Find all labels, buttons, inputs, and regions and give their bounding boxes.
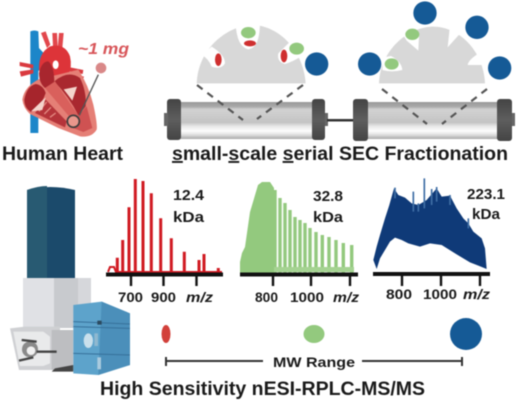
chart: 32.8 kDa spectrum: m/z [333,289,359,305]
ion source [22,341,38,357]
axis [240,272,358,276]
left ventricle [54,75,86,115]
chart: 223.1 kDa spectrum [373,178,505,302]
left atrium [39,61,54,88]
ticks [273,275,350,286]
column caps [353,99,368,141]
chart: 32.8 kDa spectrum [240,182,359,305]
sampling ring [67,115,79,127]
chart: 32.8 kDa spectrum: kDa [313,210,344,226]
ticks [131,275,196,286]
icon: mass spectrometer [10,186,130,375]
apex [73,106,92,132]
heading: High Sensitivity nESI-RPLC-MS/MS: High Sensitivity nESI-RPLC-MS/MS [100,379,425,400]
chart: 223.1 kDa spectrum: m/z [463,286,490,302]
chart: 12.4 kDa spectrum [106,179,223,305]
heart body [22,70,97,137]
column caps [167,99,181,140]
top tower [27,187,75,278]
range label: MW Range [273,354,355,370]
axis labels: 700 [118,289,143,305]
column body [178,102,316,139]
LC module [73,302,130,375]
blue dot [450,318,482,350]
aortic opening [53,60,59,69]
mass label: 32.8 [313,189,343,205]
mass label: 12.4 [173,188,204,204]
septum [45,81,78,121]
dashed zoom lines [197,85,303,120]
mass label: 223.1 [467,187,505,203]
heading: Human Heart: Human Heart [2,144,124,165]
green dot [304,325,324,343]
aorta arch [39,46,71,81]
ticks [402,275,480,286]
peak envelope [373,178,487,269]
chart: 32.8 kDa spectrum: 1000 [290,289,324,305]
dashed zoom lines [382,89,487,124]
chart: 12.4 kDa spectrum: m/z [186,289,213,305]
sampling line [79,75,98,115]
right ventricle muscle [35,100,67,127]
chart: 223.1 kDa spectrum: kDa [472,207,501,223]
right atrium [24,84,46,112]
legend: MW range [162,318,482,370]
axis labels: 800 [386,286,412,302]
blue protein [305,52,328,76]
chart: 12.4 kDa spectrum: kDa [173,210,205,226]
blue proteins [413,1,437,25]
valves [31,87,77,111]
chart: 223.1 kDa spectrum: 1000 [423,286,457,302]
peak envelope [240,182,274,273]
chart: 12.4 kDa spectrum: 900 [151,289,176,305]
peaks [108,179,222,273]
column body [365,102,500,139]
label: 1 mg: ~1 mg [78,41,129,58]
tissue sample [96,63,106,73]
source housing [10,327,60,370]
red proteins [244,40,256,46]
peaks [275,190,352,273]
icon: human heart [20,30,106,137]
pulmonary stubs [20,62,84,80]
porous bead [197,22,328,83]
heading: small-scale serial SEC Fractionation: small-scale serial SEC Fractionation [172,144,508,165]
panel: SEC column 2 [353,1,515,141]
vena cava [30,30,47,133]
axis [373,272,490,276]
panel: SEC column 1 [164,22,328,140]
green proteins [241,27,256,38]
connector tube [327,119,354,122]
middle housing [23,278,54,328]
green proteins [405,29,419,40]
red dot [162,325,170,343]
range bar [166,357,462,366]
axis labels: 800 [255,289,278,305]
aorta branches [41,31,64,48]
axis [106,272,223,276]
porous bead [358,1,511,83]
